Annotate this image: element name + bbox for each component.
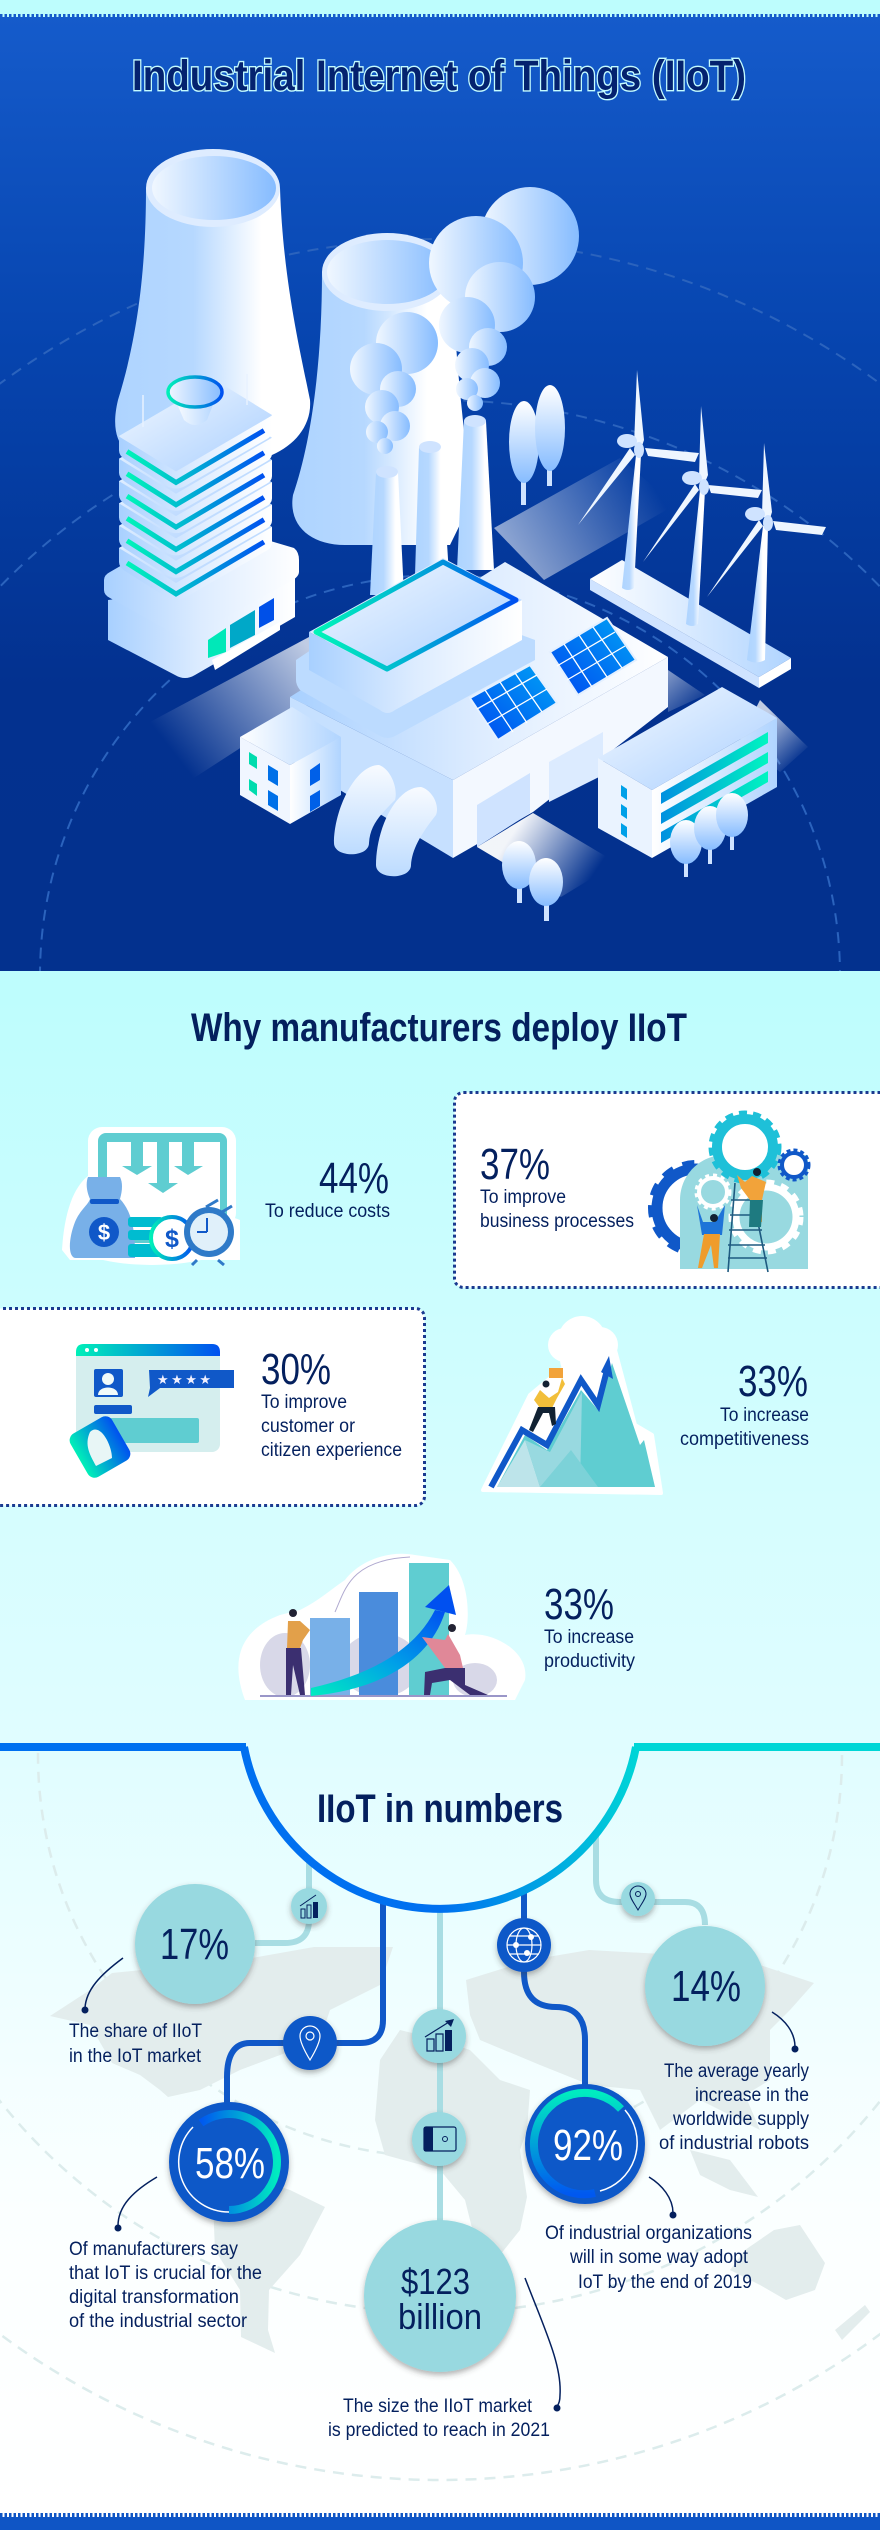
caption: market size: [328, 2396, 550, 2441]
stat: 92%: 92%: [553, 2121, 623, 2170]
callout line: [772, 2012, 798, 2052]
top strip: [0, 0, 880, 17]
callout line: [525, 2278, 560, 2412]
caption: organizations: [545, 2223, 752, 2293]
icon: globe: [497, 1918, 551, 1972]
heading: numbers: IIoT in numbers: [317, 1787, 563, 1831]
caption: robots: increase in the: [695, 2085, 809, 2106]
caption: manufacturers: [69, 2239, 262, 2332]
icon: growth chart: [412, 2009, 466, 2063]
icon: money and clock: $: [98, 1220, 110, 1245]
stat: 17%: 17%: [160, 1920, 229, 1969]
icon: location pin: [283, 2016, 337, 2070]
ladder: [728, 1183, 768, 1272]
caption: To improve: [261, 1392, 347, 1413]
connectors: [227, 1834, 705, 2225]
caption: [480, 1187, 634, 1232]
icon: mountain climber: [483, 1316, 661, 1493]
roof block: [296, 558, 535, 738]
right top line: [634, 1743, 880, 1751]
panel: business processes: [454, 1092, 880, 1288]
caption: [680, 1405, 809, 1450]
chimneys: [370, 415, 494, 595]
stat: 14%: 14%: [671, 1962, 741, 2011]
server tower funnel: [168, 377, 222, 425]
icon: bar chart and people: [238, 1554, 525, 1700]
panel: productivity: [238, 1554, 635, 1700]
server tower building: [104, 374, 299, 678]
server tower windows: [208, 598, 274, 658]
caption: robots: [659, 2061, 809, 2154]
light beams on the ground: [135, 458, 808, 897]
caption: manufacturers: digital transformation: [69, 2287, 239, 2308]
icon: small pin: [621, 1882, 655, 1916]
stat 30%: 30%: [261, 1345, 331, 1394]
callout line: [649, 2177, 676, 2218]
solar panel 1: [470, 665, 557, 740]
caption: organizations: will in some way adopt: [569, 2247, 749, 2268]
solar panel 2: [550, 618, 636, 695]
caption: share: [69, 2021, 202, 2067]
caption: competitiveness: [680, 1429, 809, 1450]
stat: 92%: [525, 2084, 645, 2204]
climber: [529, 1378, 565, 1432]
rear trees: [509, 385, 565, 505]
icon: money and clock: $: [165, 1225, 179, 1253]
panel: competitiveness: [483, 1316, 809, 1493]
pipes: [334, 765, 437, 876]
callout line: [82, 1958, 123, 2014]
caption: robots: The average yearly: [664, 2061, 809, 2082]
caption: citizen experience: [261, 1440, 402, 1461]
icon: small bars: [291, 1888, 327, 1924]
antenna: [143, 374, 247, 427]
stat 33%: 33%: [544, 1580, 614, 1629]
person right: [422, 1624, 488, 1695]
stat 37%: 37%: [480, 1140, 550, 1189]
caption: To reduce costs: [265, 1201, 390, 1222]
caption: To increase: [720, 1405, 809, 1426]
caption: market size: The size the IIoT market: [343, 2396, 533, 2417]
caption: robots: worldwide supply: [672, 2109, 809, 2130]
left annex: [240, 707, 341, 824]
panel: customer experience: [0, 1308, 424, 1506]
caption: market size: is predicted to reach in 2021: [328, 2420, 550, 2441]
panel: hero illustration: [0, 14, 880, 971]
stat: $123 billion: $123: [401, 2261, 470, 2302]
caption: share: in the IoT market: [69, 2046, 202, 2067]
caption: [544, 1627, 635, 1672]
growth arrow: [311, 1610, 445, 1696]
icon: browser and bell: [67, 1344, 234, 1481]
icon: money and clock: [62, 1127, 240, 1265]
worker on ground: [697, 1205, 725, 1235]
caption: customer or: [261, 1416, 356, 1437]
front trees: [502, 793, 748, 921]
main factory building: [290, 558, 668, 858]
panel: IIoT in numbers: [0, 1743, 880, 2482]
caption: To improve: [480, 1187, 566, 1208]
title: Industrial Internet of Things (IIoT): [132, 52, 746, 100]
wind turbine platform: [590, 560, 791, 688]
icon: browser and bell: ★★★★: [157, 1372, 211, 1387]
caption: To increase: [544, 1627, 634, 1648]
world map: [50, 1947, 870, 2353]
caption: organizations: IoT by the end of 2019: [578, 2272, 752, 2293]
heading: why manufacturers: Why manufacturers deploy IIoT: [191, 1006, 687, 1050]
steam clouds: [350, 187, 579, 454]
wind turbines: [578, 370, 826, 662]
stat: 17%: [135, 1884, 255, 2004]
callout line: [114, 2177, 157, 2232]
person left: [286, 1609, 310, 1695]
stat 33%: 33%: [738, 1357, 808, 1406]
cooling tower 2: [292, 233, 472, 545]
icon: gears and workers: [651, 1113, 809, 1272]
stat: 14%: [645, 1926, 765, 2046]
caption: productivity: [544, 1651, 635, 1672]
cooling tower 1: [115, 149, 310, 455]
left top line: [0, 1743, 246, 1751]
caption: share: The share of IIoT: [69, 2021, 202, 2042]
right annex: [598, 687, 777, 858]
worker on ladder: [737, 1175, 766, 1222]
caption: robots: of industrial robots: [659, 2133, 809, 2154]
caption: manufacturers: Of manufacturers say: [69, 2239, 238, 2260]
stat: $123 billion: billion: [398, 2296, 482, 2337]
factory door: [477, 773, 530, 847]
bottom band: [0, 2515, 880, 2530]
page background: [0, 971, 880, 2517]
icon: wallet: [412, 2112, 466, 2166]
caption: manufacturers: of the industrial sector: [69, 2311, 248, 2332]
caption: [261, 1392, 402, 1461]
caption: manufacturers: that IoT is crucial for the: [69, 2263, 262, 2284]
caption: organizations: Of industrial organizations: [545, 2223, 752, 2244]
heading arc: [244, 1747, 636, 1909]
stat: 58%: [169, 2102, 289, 2222]
stat 44%: 44%: [319, 1154, 389, 1203]
caption: business processes: [480, 1211, 634, 1232]
stat: $123 billion: [364, 2220, 516, 2372]
stat: 58%: 58%: [195, 2139, 265, 2188]
panel: reduce costs: [62, 1127, 390, 1265]
